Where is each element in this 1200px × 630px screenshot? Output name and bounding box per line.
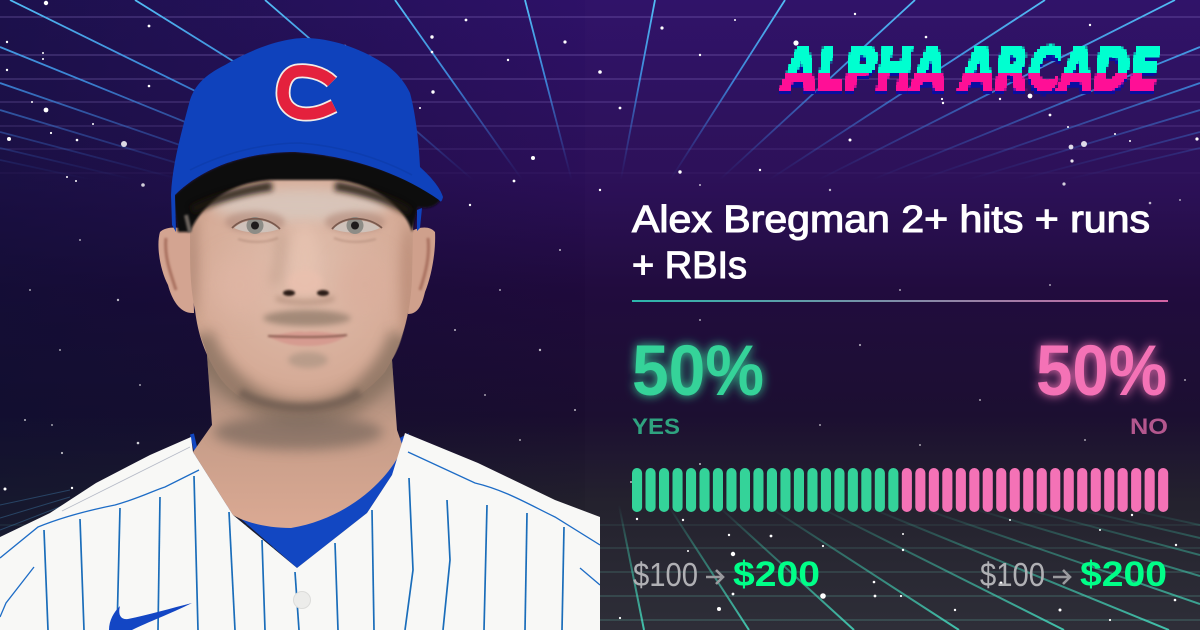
cap side sliver, right: [417, 208, 422, 231]
yes probability: 50%: [632, 332, 764, 411]
nose: [274, 224, 334, 302]
eyes: [225, 211, 385, 242]
probability bar: 20 green and 20 pink segments: [632, 468, 1168, 512]
no probability: 50%: [1036, 332, 1167, 411]
heading: market question: Alex Bregman 2+ hits + runs: [632, 199, 1150, 241]
shoulder seam: [62, 447, 190, 511]
divider: [632, 300, 1168, 302]
blue undershirt V: [225, 433, 409, 568]
cubs C logo: [283, 71, 334, 114]
jersey button: [294, 592, 310, 608]
arrow: [1053, 570, 1070, 584]
cap: [171, 38, 443, 232]
yes label: YES: [632, 414, 680, 439]
pinstripes: [44, 476, 564, 630]
payout: yes: [633, 555, 820, 594]
horizontal grid lines, bottom: [0, 525, 1200, 620]
perspective lines, bottom: [619, 505, 1200, 630]
cap crown and brim: [171, 38, 443, 232]
cap seam: [190, 143, 412, 175]
payout: no: [980, 555, 1167, 594]
heading: market question: [632, 199, 1150, 287]
no label: NO: [1130, 414, 1168, 439]
payout: yes: $200: [733, 555, 820, 594]
horizontal grid lines, top: [0, 17, 1200, 173]
no probability: [1036, 332, 1168, 439]
yoke seam piping: [0, 452, 600, 617]
yes probability: [632, 332, 764, 439]
heading: market question: + RBIs: [632, 245, 747, 287]
no segments: [902, 468, 1168, 512]
payout: yes: $100: [633, 556, 698, 593]
payout: no: $200: [1080, 555, 1167, 594]
neck: [193, 355, 403, 528]
collar edge, left: [192, 434, 197, 456]
arrow: [706, 570, 723, 584]
jersey: [0, 433, 600, 630]
nike swoosh: [109, 603, 192, 630]
perspective lines, top: [0, 0, 1200, 290]
ears: [158, 228, 435, 314]
payout: no: $100: [980, 556, 1045, 593]
player photo: Alex Bregman in Cubs uniform: [0, 38, 600, 630]
mouth: [268, 331, 347, 346]
beard, stubble and facial shading: [186, 189, 416, 450]
yes segments: [632, 468, 898, 512]
faint blue rays at lower left: [0, 490, 70, 530]
hat brim underside, brows and hair shadow: [173, 152, 441, 232]
head: [190, 171, 414, 414]
